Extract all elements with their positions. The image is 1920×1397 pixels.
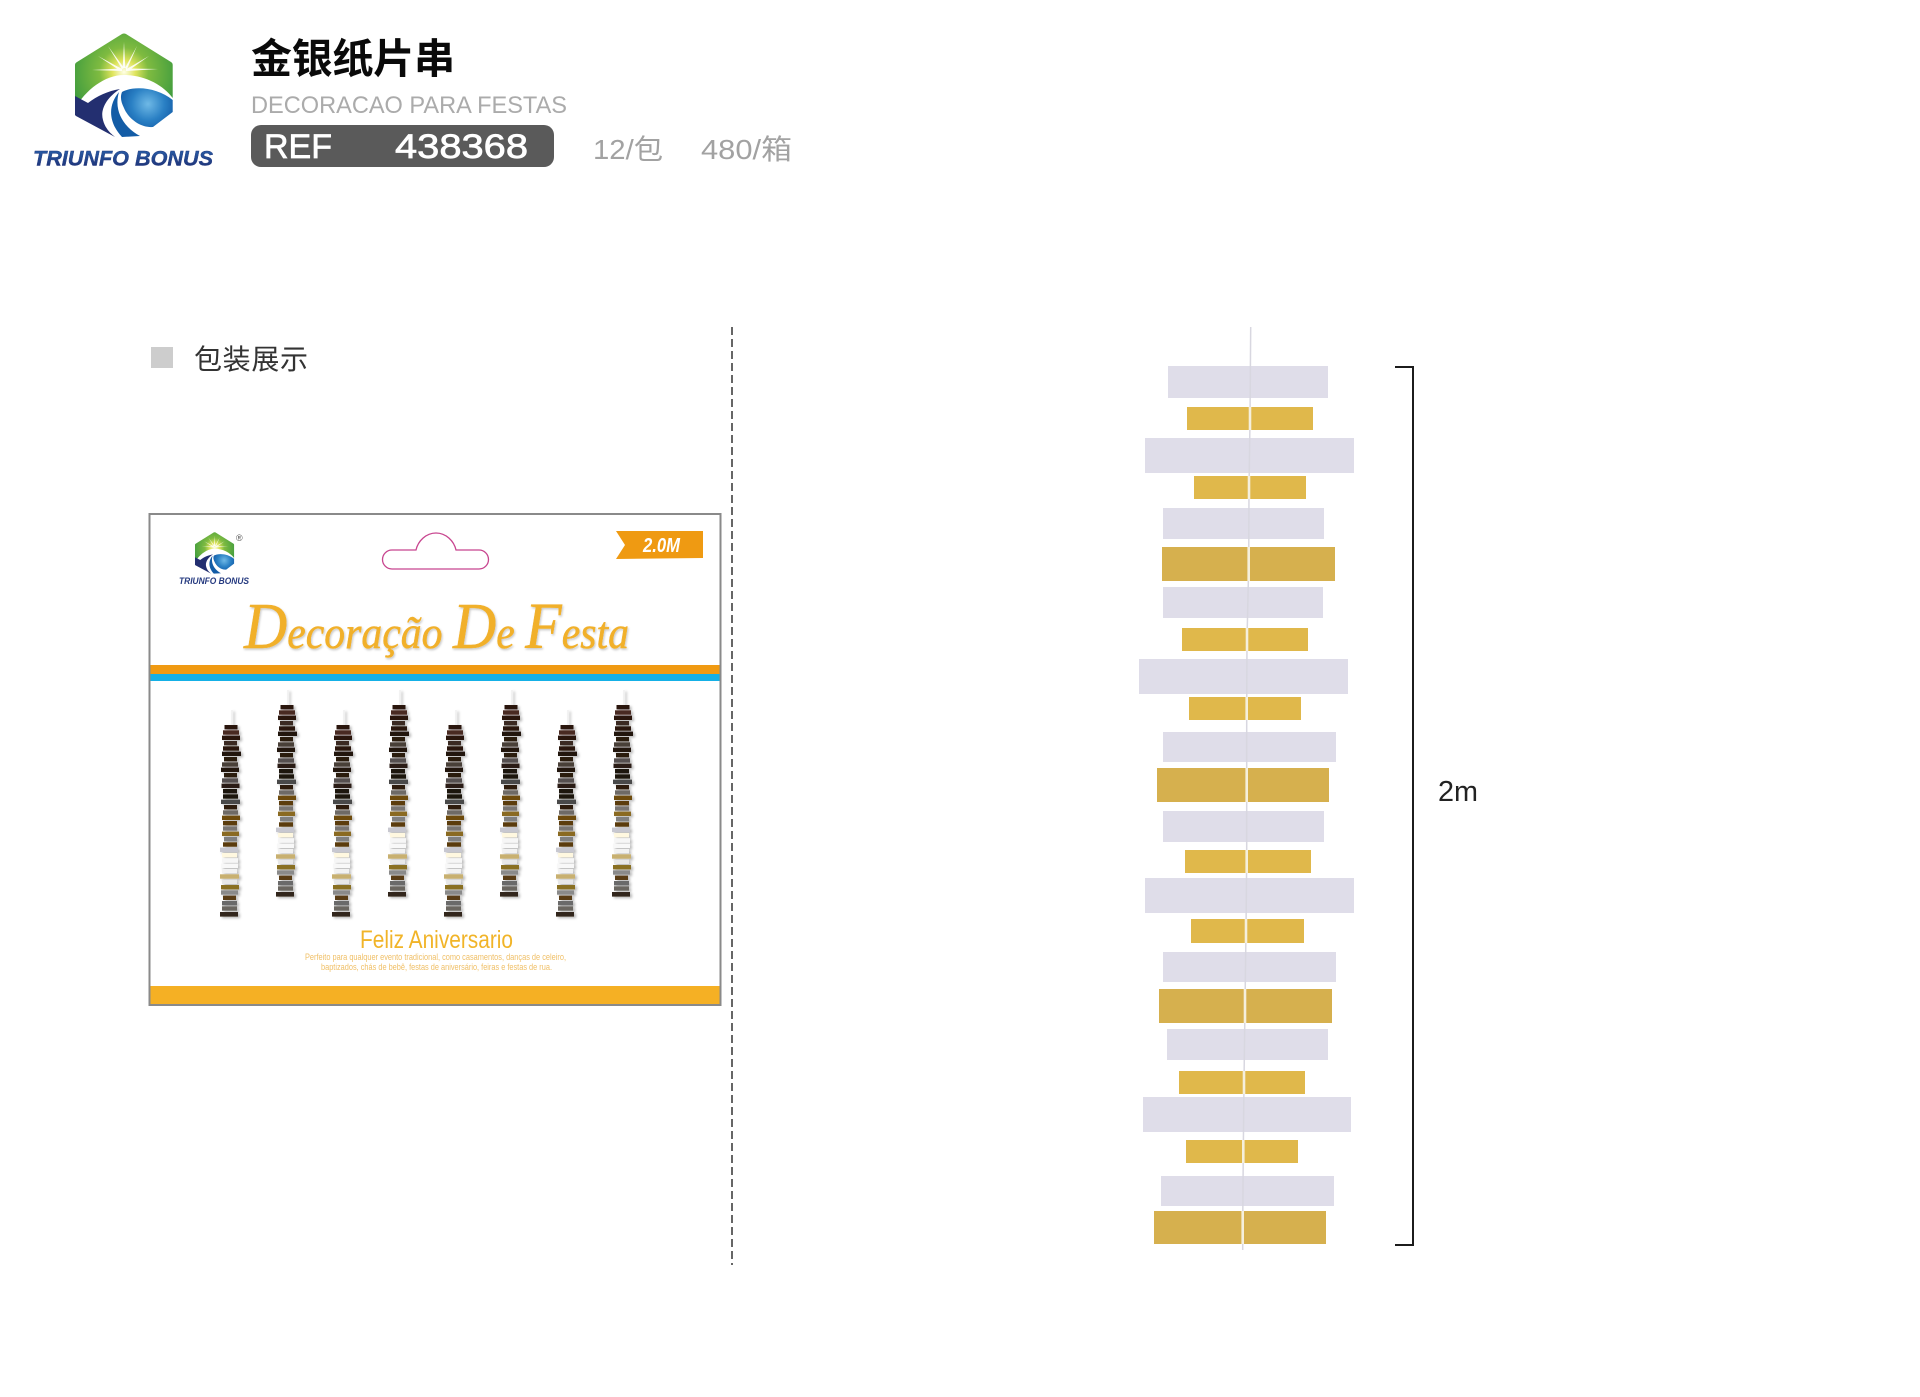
card logo: ®	[236, 533, 243, 543]
hanging thread	[1243, 327, 1251, 1250]
packing quantity per carton: 480/箱	[701, 134, 792, 165]
product: gold and silver paper string	[1139, 327, 1354, 1250]
card slogan: Feliz Aniversario	[360, 926, 513, 954]
orange band	[150, 665, 720, 674]
dimension bracket	[1395, 367, 1413, 1245]
hang hole outline	[382, 533, 489, 569]
heading text: 包装展示	[194, 344, 308, 375]
card script title: Decoração De Festa	[243, 590, 629, 663]
section heading: packaging display	[151, 344, 308, 375]
card description: Perfeito para qualquer evento tradicional, como casamentos, danças de celeiro,	[305, 952, 566, 962]
subtitle: DECORACAO PARA FESTAS	[251, 92, 567, 119]
reference badge	[251, 125, 554, 167]
length ribbon	[616, 531, 703, 559]
card description: baptizados, chás de bebê, festas de aniversário, feiras e festas de rua.	[321, 962, 552, 972]
card logo: TRIUNFO BONUS	[179, 576, 249, 586]
panel: retail packaging card	[150, 514, 720, 1005]
length ribbon: 2.0M	[642, 535, 681, 557]
paper strings on card	[220, 690, 633, 917]
reference badge: REF	[264, 128, 332, 166]
blue band	[150, 674, 720, 681]
title: 金银纸片串	[251, 36, 455, 82]
icon: grey square bullet	[151, 347, 173, 368]
packing quantity per bag: 12/包	[593, 134, 663, 165]
logo wordmark: TRIUNFO BONUS	[33, 148, 213, 170]
dimension label: 2m	[1438, 776, 1478, 808]
card description	[305, 952, 566, 972]
gold paper pieces	[1154, 407, 1335, 1244]
bottom band	[150, 986, 720, 1004]
reference badge: 438368	[395, 128, 528, 166]
logo: Triunfo Bonus	[33, 34, 213, 170]
icon: hexagon logo mark	[75, 34, 173, 137]
header: product title and reference	[251, 36, 792, 167]
thread highlights on gold pieces	[1243, 407, 1250, 1244]
silver paper pieces	[1139, 366, 1354, 1206]
panel divider: dashed line	[731, 327, 733, 1265]
card logo	[179, 532, 249, 586]
card base	[150, 514, 720, 1005]
